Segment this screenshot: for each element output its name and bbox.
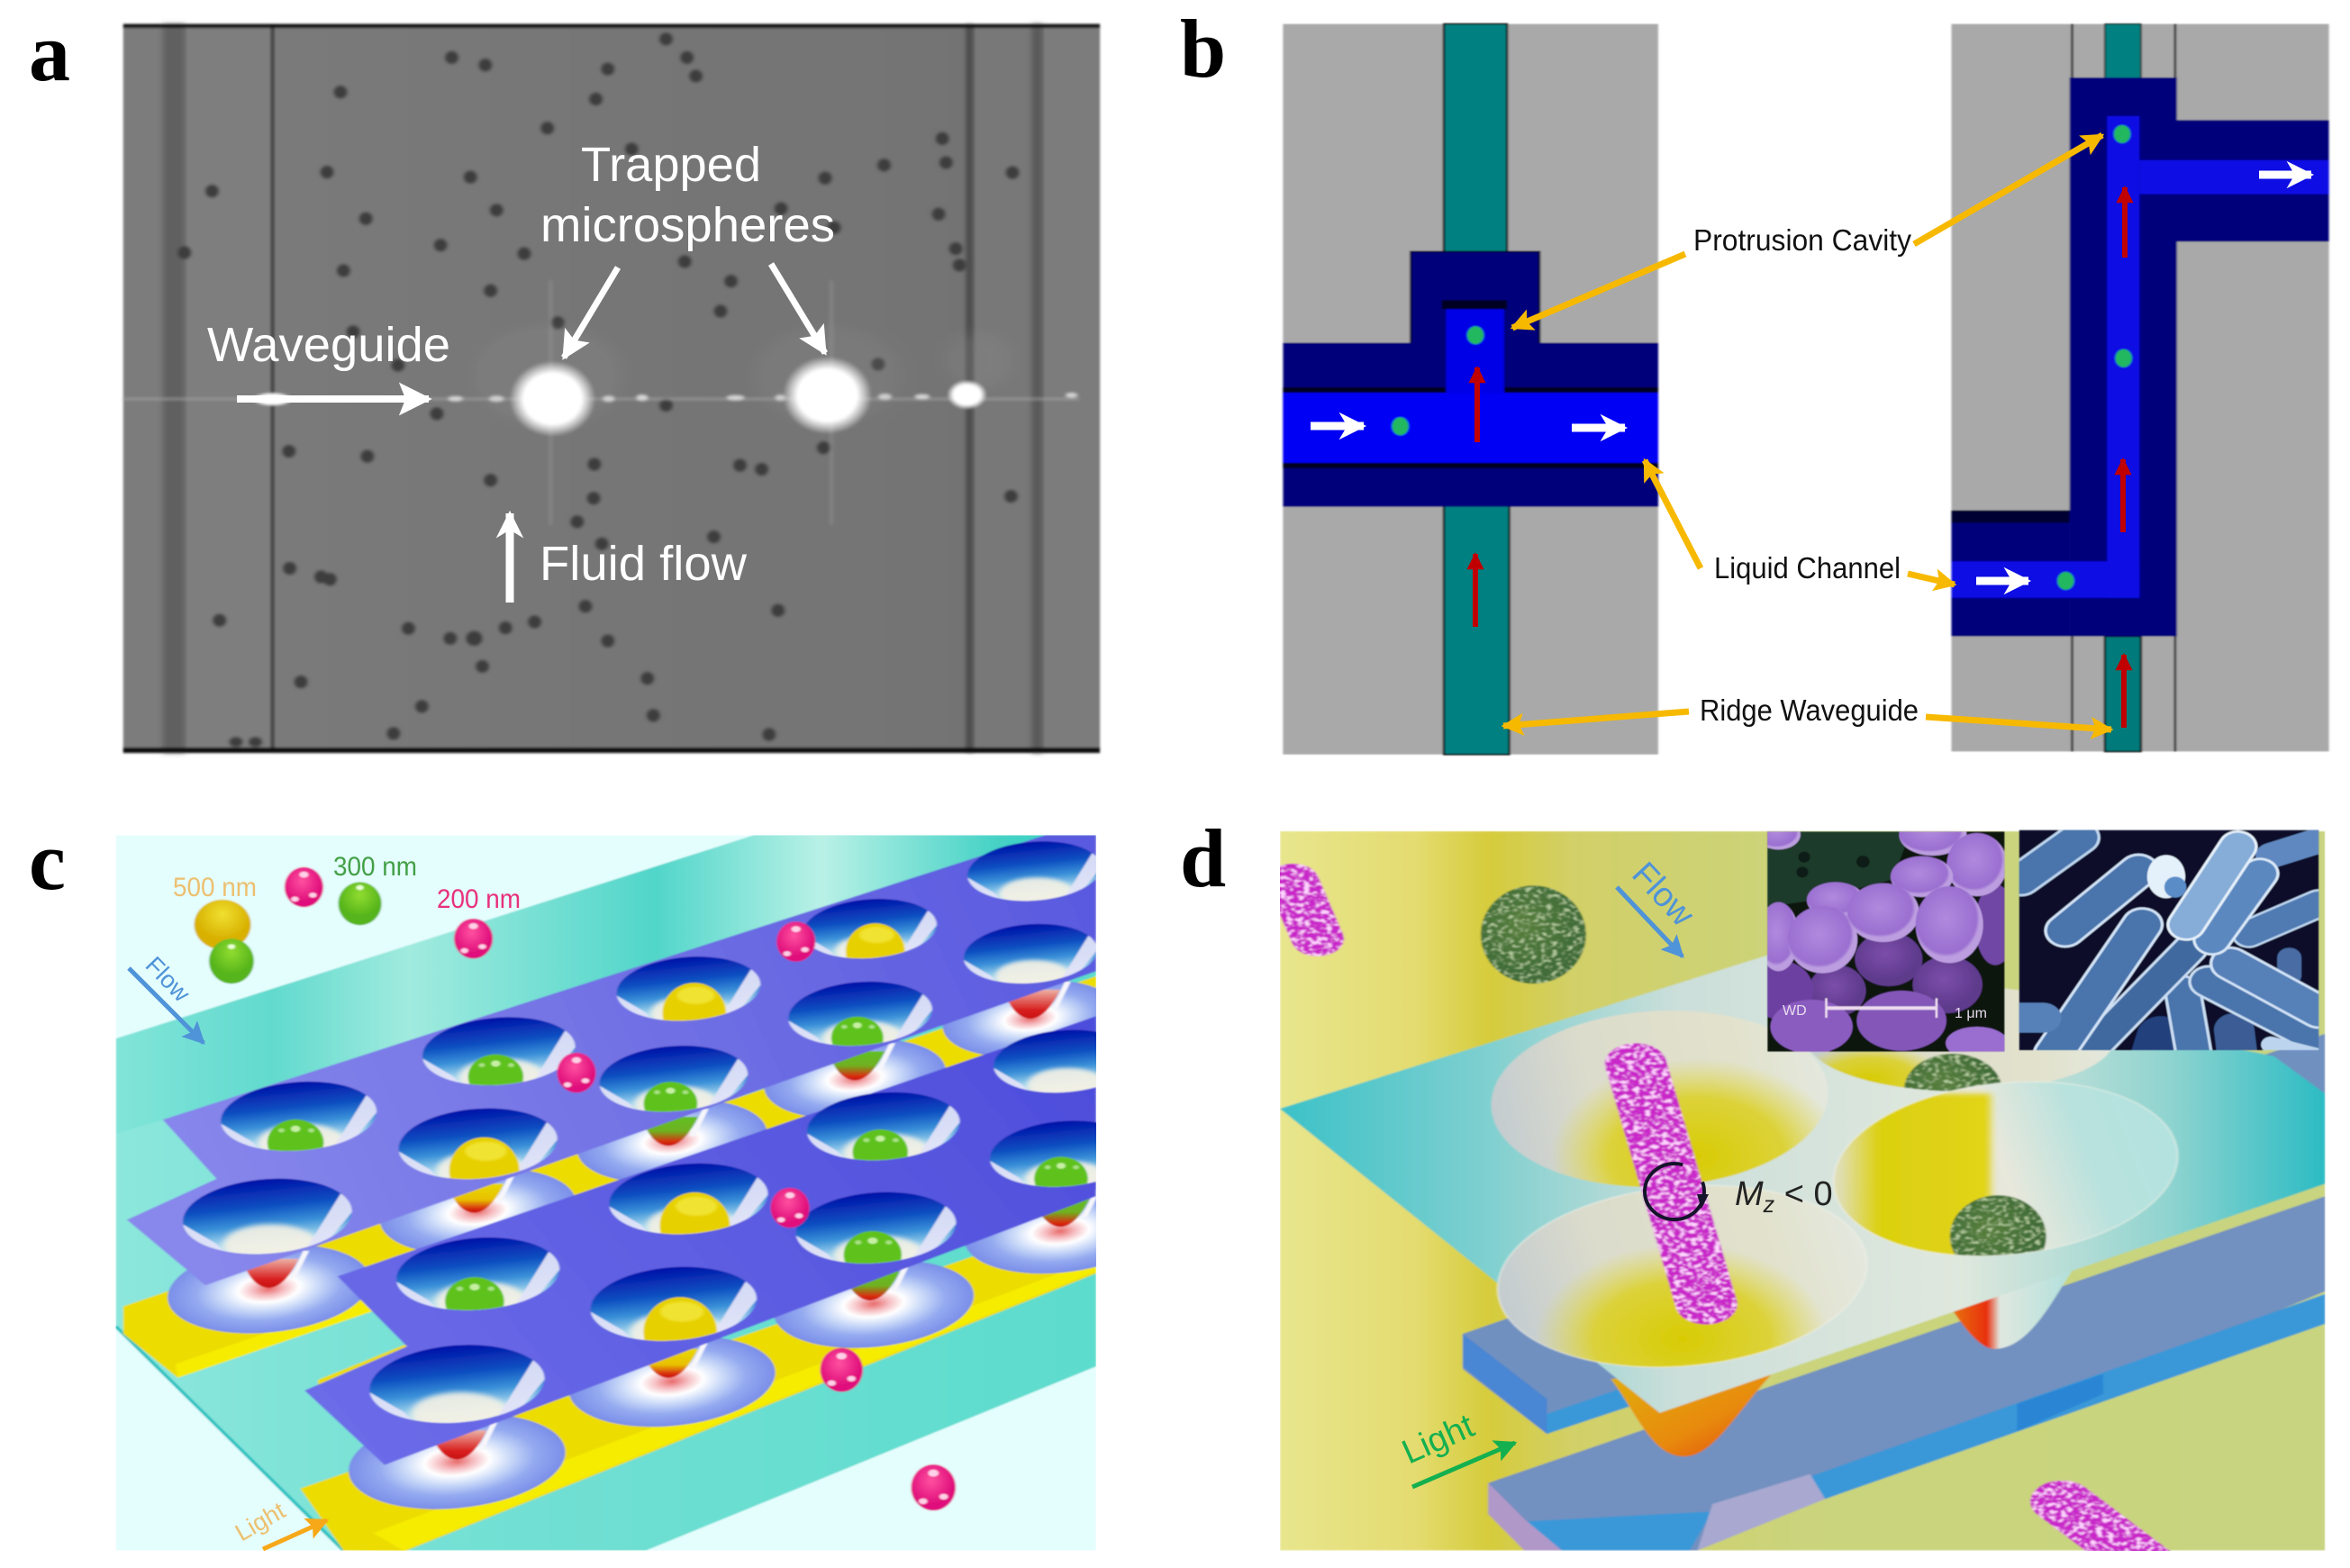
white and red flow arrows <box>1311 175 2311 728</box>
scale bar label: WD <box>1783 1003 1807 1019</box>
size labels: 300 nm <box>333 852 417 882</box>
panel letter b: b <box>1180 3 1226 95</box>
flow arrow and label: Flow <box>141 951 195 1008</box>
flow arrow and label: Flow <box>1624 855 1701 934</box>
callout: Protrusion Cavity <box>1512 135 2102 328</box>
scale bar label <box>1783 1003 1987 1021</box>
callout: Ridge Waveguide <box>1503 693 2111 730</box>
rotation indicator and moment label: < 0 <box>1774 1175 1833 1213</box>
rotation indicator and moment label: z <box>1763 1192 1775 1218</box>
panel b: waveguide schematics <box>1180 3 2329 755</box>
panel letter a: a <box>29 6 70 98</box>
callout: Liquid Channel <box>1645 460 1955 585</box>
arrow: to trapped sphere 2 <box>771 264 825 353</box>
right schematic: L-shaped channel <box>1952 24 2329 751</box>
microscope image with trapped spheres <box>123 24 1100 753</box>
inset: coccus SEM image <box>1766 830 2005 1052</box>
panel c: nanowell array <box>29 815 1168 1551</box>
rotation indicator and moment label: M <box>1735 1175 1764 1213</box>
light arrow and label: Light <box>1397 1407 1480 1472</box>
labels in panel a: Trapped <box>581 138 761 192</box>
size labels <box>173 852 521 914</box>
arrow: to trapped sphere 1 <box>564 267 618 358</box>
rotation indicator and moment label <box>1645 1164 1833 1219</box>
inset: rod bacteria SEM image <box>2019 830 2318 1060</box>
size labels: 200 nm <box>437 884 521 914</box>
arrow: waveguide <box>237 395 429 403</box>
light arrow and label <box>231 1497 327 1549</box>
left schematic: T-shaped channel <box>1283 24 1658 755</box>
labels in panel a: Waveguide <box>207 318 450 372</box>
callout: Protrusion Cavity: Protrusion Cavity <box>1693 223 1911 257</box>
size labels: 500 nm <box>173 873 257 902</box>
callout: Liquid Channel: Liquid Channel <box>1714 551 1901 585</box>
arrow: fluid flow <box>506 513 513 603</box>
array illustration <box>115 835 1168 1551</box>
callout: Ridge Waveguide: Ridge Waveguide <box>1700 693 1919 727</box>
3D trapping illustration <box>1280 831 2325 1568</box>
labels in panel a <box>207 138 835 591</box>
panel letter d: d <box>1180 812 1226 904</box>
light arrow and label <box>1397 1407 1515 1487</box>
labels in panel a: microspheres <box>540 198 835 252</box>
scale bar label: 1 μm <box>1955 1006 1987 1021</box>
panel letter c: c <box>29 815 66 907</box>
labels in panel a: Fluid flow <box>540 537 748 591</box>
panel d: bacteria trapping <box>1180 812 2325 1568</box>
panel a: fluorescence micrograph <box>29 6 1100 753</box>
light arrow and label: Light <box>231 1497 290 1546</box>
flow arrow and label <box>129 951 204 1043</box>
